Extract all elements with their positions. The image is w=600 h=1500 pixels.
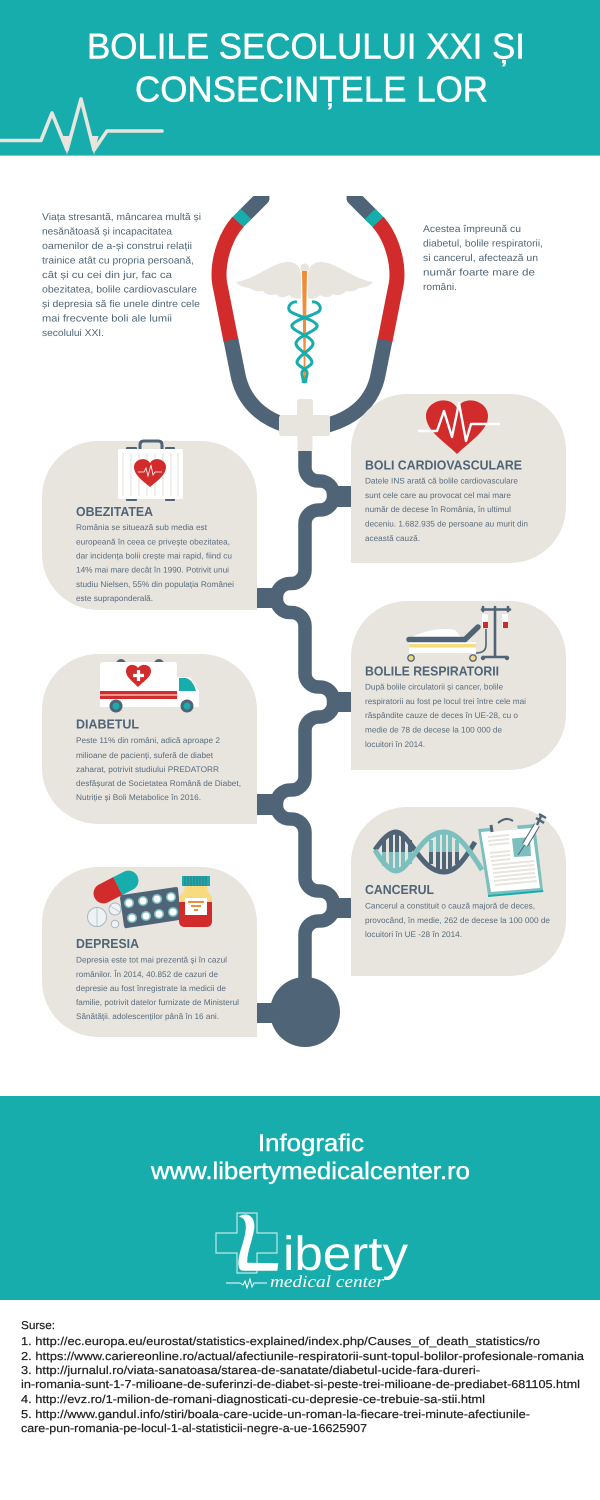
intro text left: nesănătoasă și incapacitatea (42, 226, 173, 238)
intro text right: si cancerul, afectează un (423, 253, 538, 264)
heading: BOLI CARDIOVASCULARE (365, 458, 522, 472)
body text: dar incidența bolii crește mai rapid, fiind cu (76, 552, 232, 561)
sources: 5. http://www.gandul.info/stiri/boala-care-ucide-un-roman-la-fiecare-trei-minute-afectiunile- (21, 1409, 530, 1421)
title: BOLILE SECOLULUI XXI ȘI (87, 26, 525, 66)
body text: deceniu. 1.682.935 de persoane au murit din (365, 520, 528, 528)
body text: este supraponderală. (76, 594, 153, 603)
body text: sunt cele care au provocat cel mai mare (365, 491, 511, 500)
body text (76, 956, 239, 1021)
body text: milioane de pacienți, suferă de diabet (76, 751, 214, 760)
icon: pills and bottle (88, 867, 212, 928)
body text: familie, potrivit datelor furnizate de Ministerul (76, 998, 239, 1007)
body text: Depresia este tot mai prezentă și în cazul (76, 956, 227, 964)
title: CONSECINȚELE LOR (135, 68, 488, 110)
footer heading: www.libertymedicalcenter.ro (150, 1158, 470, 1185)
body text: europeană în ceea ce privește obezitatea, (76, 538, 230, 546)
body text: respiratorii au fost pe locul trei între cele mai (365, 697, 526, 706)
sources: Surse: (21, 1320, 55, 1332)
body text: studiu Nielsen, 55% din populația Românei (76, 580, 234, 589)
body text: medie de 78 de decese la 100 000 de (365, 726, 503, 734)
body text: răspândite cauze de deces în UE-28, cu o (365, 711, 518, 720)
intro text left: și depresia să fie unele dintre cele (42, 299, 201, 310)
panel: depresia (42, 867, 257, 1037)
footer heading (150, 1130, 470, 1185)
icon: caduceus (236, 262, 373, 383)
logo: Liberty Medical Center (216, 1213, 408, 1291)
logo: Liberty Medical Center: medical center (270, 1272, 384, 1291)
body text (365, 476, 528, 543)
intro text left: obezitatea, bolile cardiovasculare (42, 284, 198, 296)
timeline trunk (256, 445, 353, 1047)
body text (365, 902, 550, 939)
intro text left: oamenilor de a-și construi relații (42, 241, 192, 252)
header band (0, 0, 600, 156)
body text: Peste 11% din români, adică aproape 2 (76, 736, 220, 745)
sources: 1. http://ec.europa.eu/eurostat/statistics-explained/index.php/Causes_of_death_statistics/ro (21, 1336, 540, 1348)
panel: boli cardiovasculare (351, 394, 566, 563)
sources: in-romania-sunt-1-7-milioane-de-suferinzi-de-diabet-si-peste-trei-milioane-de-prediabet-681105.html (21, 1379, 580, 1391)
icon: ECG line in header (1, 99, 162, 155)
stethoscope (219, 198, 397, 425)
body text: număr de decese în România, în ultimul (365, 505, 511, 514)
icon: heart with ECG (418, 400, 500, 454)
footer heading: Infografic (258, 1130, 364, 1157)
icon: DNA helix (375, 832, 482, 872)
sources (21, 1320, 585, 1435)
icon: hospital bed and IV (408, 607, 510, 661)
heading: CANCERUL (365, 882, 434, 897)
icon: ambulance (100, 659, 199, 711)
body text (76, 736, 241, 802)
panel: cancerul (351, 807, 566, 976)
heading: DIABETUL (76, 716, 139, 732)
body text: După bolile circulatorii și cancer, bolile (365, 682, 503, 692)
panel: diabetul (42, 654, 257, 824)
intro text right: români. (423, 282, 457, 293)
body text (76, 523, 234, 603)
intro text right: diabetul, bolile respiratorii, (423, 238, 543, 250)
intro text right: număr foarte mare de (423, 268, 536, 278)
intro text left: mai frecvente boli ale lumii (42, 314, 172, 324)
logo: Liberty Medical Center: iberty (283, 1228, 408, 1281)
body text: România se situează sub media est (76, 523, 208, 532)
icon: medical cross (279, 399, 330, 451)
heading: OBEZITATEA (76, 504, 154, 519)
body text: Nutriție și Boli Metabolice în 2016. (76, 793, 201, 802)
body text: românilor. În 2014, 40.852 de cazuri de (76, 969, 218, 979)
body text (365, 682, 526, 749)
intro text left: Viața stresantă, mâncarea multă și (42, 212, 201, 223)
body text: depresie au fost înregistrate la medicii de (76, 984, 226, 993)
body text: locuitori în UE -28 în 2014. (365, 930, 462, 939)
body text: Sănătății. adolescenților până în 16 ani. (76, 1012, 219, 1021)
intro text right: Acestea împreună cu (423, 224, 521, 235)
panel: obezitatea (42, 441, 257, 610)
body text: locuitori în 2014. (365, 740, 425, 749)
intro text left: trainice atât cu propria persoană, (42, 256, 194, 266)
icon: medical case (118, 441, 183, 501)
body text: această cauză. (365, 534, 420, 543)
panel: bolile respiratorii (351, 601, 566, 770)
footer band (0, 1096, 600, 1300)
body text: zaharat, potrivit studiului PREDATORR (76, 765, 219, 774)
intro text left: cât și cu cei din jur, fac ca (42, 270, 173, 281)
heading: DEPRESIA (76, 936, 140, 951)
body text: Cancerul a constituit o cauză majoră de deces, (365, 902, 535, 910)
body text: Datele INS arată că bolile cardiovasculare (365, 476, 518, 486)
intro text left (42, 212, 201, 339)
intro text right (423, 224, 543, 293)
heading: BOLILE RESPIRATORII (365, 664, 499, 678)
body text: desfășurat de Societatea Română de Diabet, (76, 779, 241, 788)
title (87, 26, 525, 110)
sources: care-pun-romania-pe-locul-1-al-statisticii-negre-a-ue-16625907 (21, 1423, 367, 1435)
icon: clipboard and syringe (478, 814, 546, 897)
sources: 2. https://www.cariereonline.ro/actual/afectiunile-respiratorii-sunt-topul-bolilor-profesionale-romania (21, 1351, 585, 1363)
body text: 14% mai mare decât în 1990. Potrivit unui (76, 566, 229, 575)
body text: provocând, în medie, 262 de decese la 100 000 de (365, 916, 550, 925)
sources: 3. http://jurnalul.ro/viata-sanatoasa/starea-de-sanatate/diabetul-ucide-fara-dureri- (21, 1365, 480, 1377)
intro text left: secolului XXI. (42, 328, 104, 339)
sources: 4. http://evz.ro/1-milion-de-romani-diagnosticati-cu-depresie-ce-trebuie-sa-stii.html (21, 1394, 485, 1406)
